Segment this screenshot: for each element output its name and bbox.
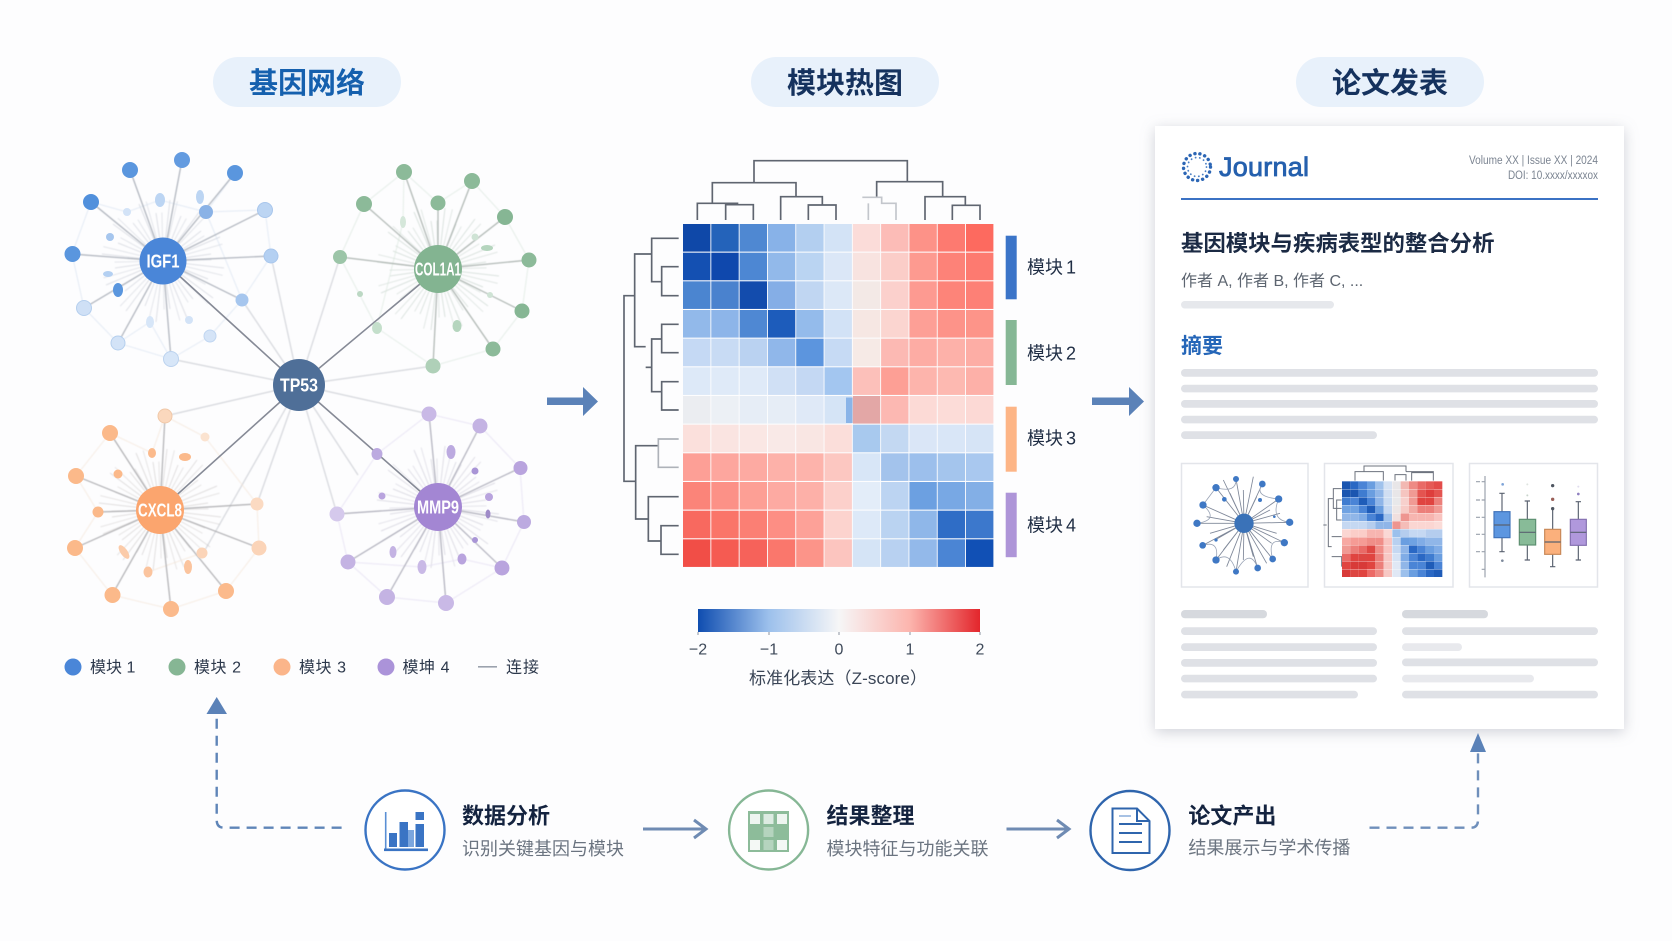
icon: bar chart bbox=[366, 790, 444, 870]
module sidebar labels: 模块 4 bbox=[1027, 516, 1076, 536]
step: 论文产出 bbox=[1090, 791, 1350, 870]
network legend: 模块 1 bbox=[90, 658, 135, 676]
journal meta: DOI: 10.xxxx/xxxxox bbox=[1508, 170, 1598, 182]
module 2 nodes bbox=[333, 164, 536, 374]
module 3 links bbox=[75, 416, 259, 609]
color scale bbox=[689, 609, 985, 688]
hub: COL1A1: COL1A1 bbox=[415, 260, 461, 280]
step: 数据分析: 识别关键基因与模块 bbox=[462, 839, 624, 859]
body text left column bbox=[1181, 610, 1377, 698]
heading: 论文发表 bbox=[1296, 57, 1484, 107]
hub: MMP9: MMP9 bbox=[417, 498, 459, 518]
heading: 论文发表: 论文发表 bbox=[1332, 67, 1448, 100]
heading: 模块热图 bbox=[751, 57, 939, 107]
panel: journal paper bbox=[1155, 126, 1624, 729]
color scale: 1 bbox=[906, 642, 915, 658]
journal meta bbox=[1469, 155, 1599, 182]
step: 数据分析: 数据分析 bbox=[462, 804, 550, 828]
dashed arrow: analysis back to network bbox=[206, 697, 342, 828]
color scale: 0 bbox=[835, 642, 844, 658]
column dendrogram bbox=[697, 161, 980, 220]
arrow: network to heatmap bbox=[547, 387, 598, 416]
icon: result grid bbox=[729, 790, 808, 870]
figure: mini box plot bbox=[1470, 464, 1598, 587]
module sidebar labels: 模块 2 bbox=[1027, 344, 1076, 364]
hub: TP53: TP53 bbox=[280, 376, 318, 396]
arrow: analysis to results bbox=[643, 820, 706, 838]
dashed arrow: output to paper bbox=[1370, 733, 1486, 828]
row dendrogram bbox=[624, 238, 679, 554]
authors: 作者 A, 作者 B, 作者 C, ... bbox=[1181, 272, 1363, 290]
hub: COL1A1 bbox=[414, 245, 462, 293]
module sidebar labels bbox=[1006, 236, 1076, 557]
hub: MMP9 bbox=[414, 483, 462, 531]
network legend bbox=[64, 658, 539, 676]
figure: mini network bbox=[1182, 464, 1308, 587]
hub: IGF1 bbox=[140, 238, 186, 284]
abstract heading: 摘要 bbox=[1181, 334, 1223, 358]
module 4 nodes bbox=[330, 406, 531, 611]
hub: TP53 bbox=[273, 359, 325, 411]
heading: 基因网络 bbox=[213, 57, 401, 107]
hub to TP53 links bbox=[160, 261, 438, 510]
body text right column bbox=[1402, 610, 1598, 698]
network legend: 模坤 4 bbox=[402, 658, 450, 676]
module 2 links bbox=[340, 172, 529, 366]
color scale: 2 bbox=[976, 642, 985, 658]
network legend: 模块 2 bbox=[194, 658, 241, 676]
abstract lines bbox=[1181, 369, 1598, 439]
step: 结果整理 bbox=[729, 790, 988, 870]
journal meta: Volume XX | Issue XX | 2024 bbox=[1469, 155, 1599, 167]
journal logo: Journal bbox=[1219, 152, 1309, 182]
gene network chart bbox=[64, 152, 536, 617]
network legend: 连接 bbox=[506, 658, 539, 676]
icon: document bbox=[1090, 791, 1170, 870]
module 1 nodes bbox=[64, 152, 278, 366]
module 4 links bbox=[337, 414, 524, 603]
color scale: −1 bbox=[760, 642, 778, 658]
module 3 nodes bbox=[67, 409, 266, 617]
step: 结果整理: 模块特征与功能关联 bbox=[826, 839, 988, 859]
figure: mini heatmap bbox=[1323, 464, 1453, 587]
heading: 模块热图: 模块热图 bbox=[787, 67, 903, 100]
hub: IGF1: IGF1 bbox=[146, 252, 180, 272]
heading: 基因网络: 基因网络 bbox=[249, 67, 365, 100]
step: 论文产出: 结果展示与学术传播 bbox=[1188, 838, 1350, 858]
module sidebar labels: 模块 1 bbox=[1027, 258, 1076, 278]
step: 数据分析 bbox=[366, 790, 624, 870]
arrow: results to paper bbox=[1006, 820, 1069, 838]
color scale: 标准化表达（Z-score） bbox=[749, 669, 927, 688]
hub: CXCL8: CXCL8 bbox=[138, 500, 182, 520]
heatmap bbox=[683, 224, 993, 567]
hub: CXCL8 bbox=[136, 486, 184, 534]
module sidebar labels: 模块 3 bbox=[1027, 428, 1076, 448]
arrow: heatmap to journal bbox=[1092, 387, 1144, 416]
color scale: −2 bbox=[689, 642, 707, 658]
faint links from TP53 bbox=[165, 256, 433, 550]
network legend: 模块 3 bbox=[299, 658, 346, 676]
paper title: 基因模块与疾病表型的整合分析 bbox=[1181, 231, 1494, 256]
step: 结果整理: 结果整理 bbox=[826, 804, 915, 828]
module 1 links bbox=[72, 160, 271, 359]
step: 论文产出: 论文产出 bbox=[1188, 804, 1276, 828]
